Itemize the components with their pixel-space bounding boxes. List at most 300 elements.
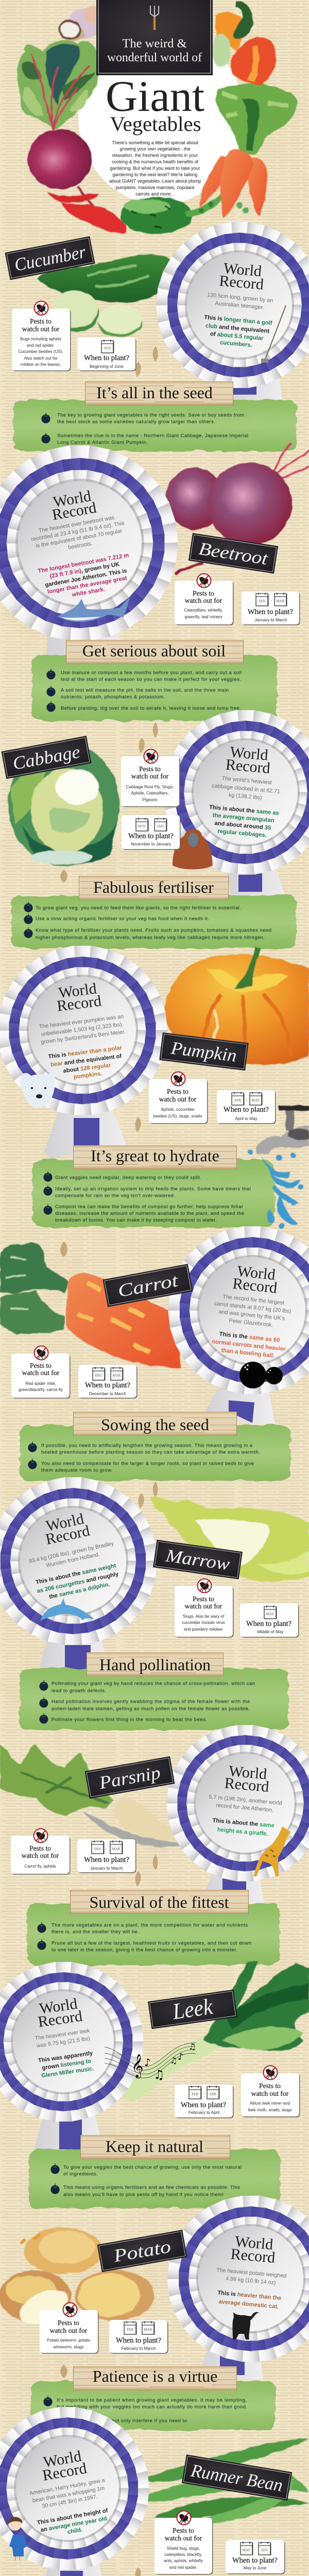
rosette text: runner bean record: This is about the height of (37, 2507, 109, 2526)
illustration: music notes: ♪ (144, 2056, 151, 2069)
ribbon tail: carrot rosette (205, 1386, 275, 1425)
card: pests to watch out for: Cabbage Root Fly, Slugs, (126, 785, 174, 789)
icon: calendars May to Jun (241, 2542, 271, 2555)
bullet list (41, 412, 248, 445)
icon: calendars Jan to Mar: JAN (94, 1847, 101, 1851)
rosette text: beetroot record: is the equivalent of about 70 regular (36, 528, 123, 549)
illustration: marrow (150, 1497, 309, 1581)
rosette: world record parsnip (146, 1709, 309, 1897)
card: pests to watch out for: Caterpillars, whitefly, (184, 608, 222, 613)
section: potato (0, 2178, 309, 2379)
ribbon tail: cabbage rosette (227, 868, 288, 904)
icon: calendars Apr to May: - (246, 1097, 248, 1101)
icon: calendar May: MAY (266, 1612, 274, 1616)
rosette text: pumpkin record (34, 977, 131, 1083)
rosette text: potato record: The heaviest potato weighed (216, 2267, 287, 2279)
card: pests to watch out for: and red spider. (169, 2565, 197, 2570)
bullet list (43, 1171, 251, 1223)
rosette text: carrot record: This is the same as 60 (219, 1331, 280, 1344)
card: pests to watch out for (11, 1829, 70, 1874)
wood sign heading (79, 876, 229, 900)
card: when to plant (175, 2084, 234, 2119)
section: It's great to hydrate (32, 1106, 309, 1229)
icon: calendars Jan to Mar: JAN (259, 599, 265, 603)
ribbon tail: marrow rosette (38, 1633, 109, 1674)
icon: no pests (197, 574, 211, 587)
bullet list: If possible, you need to artificially lengthen the growing season. This means growing in a (41, 1443, 253, 1448)
sign: Potato (97, 2230, 187, 2272)
illustration: peas (185, 191, 249, 216)
icon: calendars Nov to Jan: NOV (138, 824, 146, 828)
card: pests to watch out for: watch out for (185, 597, 222, 604)
card: when to plant (109, 2320, 168, 2353)
icon: golf club (261, 306, 286, 363)
card: pests to watch out for: watch out for (22, 1369, 60, 1377)
card: pests to watch out for: Slugs. Also be wary of (183, 1614, 225, 1619)
section: Keep it natural (29, 2135, 280, 2208)
illustration: broccoli (212, 34, 231, 67)
rosette text: pumpkin record: The heaviest ever pumpkin was an (39, 1013, 124, 1030)
card: pests to watch out for: leek moth, snails, slugs (248, 2108, 291, 2112)
card: when to plant: When to plant? (85, 1381, 130, 1389)
sign: Cucumber: Cucumber (13, 242, 88, 275)
sign: Cabbage: Cabbage (11, 741, 82, 774)
icon: calendars Jan to Mar: MAR (112, 1847, 121, 1851)
wood sign heading: Hand pollination (99, 1655, 211, 1674)
section: Get serious about soil (32, 640, 277, 721)
ribbon tail: parsnip rosette (200, 1865, 264, 1904)
bullet list: You also need to compensate for the larger & longer roots, so plant in raised beds to give (41, 1460, 254, 1466)
wood sign heading (73, 2366, 237, 2391)
rosette text: cabbage record: cabbage clocked in at 62.71 (212, 783, 280, 795)
rosette text: beetroot record (24, 483, 135, 603)
intro text (109, 140, 201, 197)
rosette text: marrow record: as 206 courgettes and roughly (37, 1571, 119, 1595)
icon: calendars Jan to Mar (92, 1840, 123, 1854)
illustration: cat (233, 2312, 259, 2340)
card: pests to watch out for (40, 2303, 99, 2353)
header: title and vegetable wreath (17, 0, 298, 234)
card: pests to watch out for: cucumber mosaic virus (182, 1620, 225, 1625)
intro text: gardening. But what if you want to take your (110, 166, 200, 171)
rosette text: marrow record: Record (44, 1522, 91, 1548)
rosette text: leek record: Record (37, 2008, 83, 2030)
card: pests to watch out for: watch out for (185, 1602, 222, 1610)
icon: calendars Apr to May (232, 1092, 263, 1106)
illustration: polar bear (21, 1073, 55, 1108)
card: when to plant: When to plant? (116, 2336, 161, 2345)
card: when to plant: January to March (254, 618, 287, 622)
rosette text: runner bean record: bean that was a whopping 1m (32, 2485, 105, 2504)
icon: calendar June: JUN (104, 346, 111, 350)
icon: calendars May to Jun: - (255, 2547, 256, 2551)
green panel (13, 400, 297, 451)
bullet list: Use manure or compost a few months before you plant, and carry out a soil (61, 670, 242, 675)
wood sign heading: It’s great to hydrate (91, 1146, 219, 1165)
illustration: girl (8, 2517, 28, 2561)
illustration: dolphin (40, 1598, 95, 1621)
ribbon tail: cucumber rosette (227, 374, 282, 401)
rosette text: beetroot record: World (52, 487, 92, 511)
card: when to plant (226, 2540, 285, 2574)
bullet list: the best stock as some varieties naturally grow larger than others. (57, 418, 215, 425)
rosette text: beetroot record: The heaviest ever beetroot was (38, 515, 115, 534)
rosette text: runner bean record: World (42, 2448, 82, 2471)
rosette text: carrot record: carrot stands at 9.07 kg (20 lbs) (214, 1300, 291, 1315)
icon: no pests (171, 1072, 185, 1086)
bullet list: It’s important to be patient when growing giant vegetables. It may be tempting, (57, 2397, 247, 2403)
illustration: music notes (105, 2042, 196, 2082)
icon: no pests (177, 2511, 191, 2524)
rosette text: marrow record: World (44, 1510, 85, 1535)
rosette: world record pumpkin (0, 928, 191, 1133)
icon: no pests (34, 1829, 47, 1842)
wood sign heading: Survival of the fittest (89, 1893, 229, 1911)
section: carrot (0, 1209, 309, 1425)
icon: calendars May to Jun: MAY (243, 2548, 250, 2552)
card: when to plant: When to plant? (224, 1106, 269, 1114)
illustration: music notes: 𝄞 (131, 2054, 144, 2079)
green panel (11, 895, 296, 948)
intro text: growing your own vegetables - the (119, 146, 191, 151)
rosette text: marrow record: 93.4 kg (206 lbs), grown by Bradley (28, 1540, 115, 1565)
bullet list: compensate for rain so the veg isn’t over-watered. (55, 1192, 175, 1198)
intro text: There’s something a little bit special about (112, 140, 198, 145)
ribbon tail: beetroot rosette (46, 629, 135, 666)
icon: calendars Dec to Mar: MAR (113, 1374, 121, 1378)
rosette: world record leek (0, 1945, 165, 2138)
rosette: world record potato (145, 2178, 309, 2379)
card: when to plant: Middle of May (258, 1630, 284, 1634)
rosette text: cabbage record: This is about the same as (209, 804, 279, 817)
rosette text: cucumber record: This is longer than a golf (204, 314, 272, 327)
wood sign heading: It’s all in the seed (96, 383, 213, 402)
icon: calendars Jan to Mar: - (271, 598, 272, 602)
rosette: world record beetroot (0, 425, 204, 661)
card: pests to watch out for: Bugs including aphids (20, 337, 61, 341)
card: pests to watch out for (154, 2511, 213, 2575)
rosette text: leek record: This was apparently (38, 2050, 94, 2064)
icon: no pests (144, 749, 158, 764)
card: pests to watch out for (11, 1346, 70, 1398)
icon: calendars Apr to May: APR (234, 1098, 242, 1103)
card: pests to watch out for: Pests to (167, 1088, 188, 1095)
card: pests to watch out for: Red spider mite, (25, 1381, 56, 1386)
illustration: beetroots (165, 443, 309, 574)
illustration: orangutan (173, 829, 213, 870)
section: marrow (0, 1460, 309, 1674)
rosette text: cucumber record: Record (218, 272, 264, 293)
bullet list: The key to growing giant vegetables is the right seeds. Save or buy seeds from (57, 412, 244, 417)
card: pests to watch out for: Carrot fly, aphids (24, 1864, 56, 1869)
illustration: beet leaves (17, 40, 98, 130)
sign: Carrot: Carrot (116, 1270, 180, 1301)
title line: The weird &: The weird & (122, 37, 187, 50)
card: pests to watch out for: Allium leek miner and (250, 2101, 290, 2106)
sign: Cucumber (5, 236, 95, 280)
card: when to plant (78, 1365, 137, 1398)
bullet list: To grow giant veg, you need to feed them like giants, so the right fertiliser is essential. (36, 905, 241, 910)
wood sign heading (80, 2135, 230, 2159)
illustration: carrots (200, 149, 267, 218)
wood sign heading: Sowing the seed (101, 1415, 209, 1434)
bullet list: lead to growth defects. (52, 1688, 106, 1693)
card: pests to watch out for: wireworm, slugs (53, 2345, 83, 2349)
bullet list (39, 1680, 255, 1724)
rosette text: carrot record: Peter Glazebrook. (229, 1317, 273, 1328)
rosette text: leek record (30, 1994, 96, 2079)
illustration: music notes: ♪ (178, 2052, 183, 2062)
card: when to plant: When to plant? (248, 608, 293, 616)
ribbon tail: runner bean rosette (44, 2555, 104, 2576)
rosette text: potato record: average domestic cat. (218, 2299, 279, 2310)
title line: wonderful world of: wonderful world of (107, 50, 202, 64)
card: pests to watch out for: Pests to (29, 1844, 51, 1852)
rosette text: carrot record (209, 1261, 296, 1360)
illustration: squash (215, 2, 277, 86)
bullet list: Use a slow acting organic fertiliser so your veg has food when it needs it. (36, 916, 209, 921)
bullet list: pollen-laden male stamen, getting as much pollen on the female flower as possible. (52, 1705, 250, 1711)
rosette text: runner bean record: an average nine year old (40, 2516, 108, 2533)
sign: Leek (148, 1990, 237, 2029)
card: pests to watch out for: watch out for (50, 2327, 88, 2334)
illustration: giraffe (253, 1826, 291, 1876)
intro text: carrots and more... (135, 192, 175, 197)
section: cucumber (5, 205, 309, 405)
card: pests to watch out for: Pests to (139, 765, 161, 773)
rosette text: cucumber record: 130.5cm long, grown by an (207, 292, 273, 304)
rosette text: cucumber record (202, 259, 278, 350)
rosette text: carrot record: and was grown by the UK’s (218, 1309, 285, 1322)
rosette text: potato record: 4.98 kg (10 lb 14 oz) (226, 2276, 276, 2286)
illustration: red chillies (47, 192, 127, 234)
white circle behind title (78, 27, 243, 205)
card: when to plant (242, 591, 300, 625)
rosette: world record runner bean (0, 2390, 171, 2576)
sign: Runner Bean (182, 2454, 292, 2501)
rosette text: pumpkin record: grown by Switzerland’s Beni Meier. (41, 1029, 126, 1045)
card: pests to watch out for: Pests to (193, 1595, 214, 1603)
bullet list (46, 669, 242, 712)
rosette text: cabbage record: and about around 35 (214, 820, 271, 832)
rosette text: marrow record: the same as a dolphin. (48, 1581, 110, 1600)
card: when to plant: January to March (90, 1866, 123, 1871)
card: pests to watch out for: Pests to (58, 2319, 79, 2327)
wood sign heading: Keep it natural (106, 2137, 203, 2156)
bullet list: Giant veggies need regular, deep watering or they could split. (55, 1175, 201, 1180)
sign: Carrot (102, 1264, 193, 1307)
rosette text: pumpkin record: This is heavier than a polar (48, 1045, 123, 1060)
icon: calendars Apr to May: MAY (252, 1098, 260, 1103)
intro text: cooking & the numerous health benefits of (112, 159, 199, 164)
ribbon tail: pumpkin rosette (44, 1097, 126, 1159)
section: It's all in the seed (13, 381, 297, 451)
icon: calendars Jan to Mar (256, 592, 287, 606)
icon: calendars Feb to Mar: MAR (144, 2328, 152, 2332)
rosette text: cabbage record: the average orangutan (212, 812, 274, 824)
bullet list: Pollinate your flowers first thing in the morning to beat the bees. (52, 1717, 207, 1722)
rosette: world record marrow (0, 1460, 180, 1663)
card: pests to watch out for: watch out for (159, 1095, 197, 1103)
card: pests to watch out for: greenfly, leaf miners (184, 615, 222, 619)
bullet list: To give your veggies the best chance of growing, use only the most natural (63, 2164, 242, 2170)
illustration: parsnip root (82, 1797, 197, 1847)
rosette text: beetroot record: gardener Joe Atherton. This is (45, 568, 127, 588)
card: when to plant (217, 1090, 276, 1124)
rosette text: cabbage record: regular cabbages. (217, 828, 267, 839)
wood sign heading (73, 1412, 237, 1436)
section: Patience is a virtue (31, 2366, 276, 2430)
green panel (31, 2381, 276, 2430)
rosette text: runner bean record (23, 2444, 113, 2541)
rosette text: cucumber record: club and the equivalent (205, 323, 270, 334)
wood sign heading (87, 1652, 224, 1676)
icon: calendars Feb to Apr (189, 2086, 219, 2099)
rosette text: parsnip record: height as a giraffe. (217, 1827, 268, 1837)
bullet list: them adequate room to grow. (41, 1467, 113, 1472)
card: pests to watch out for: Aphids, Caterpillars, (131, 791, 169, 795)
card: pests to watch out for: Pigeons (142, 798, 158, 802)
bullet list: to one later in the season, giving it the best chance of growing into a monster. (52, 1946, 237, 1953)
rosette text: runner bean record: 30 cm (4ft 3in) in 1997. (42, 2494, 98, 2510)
rosette text: pumpkin record: World (58, 980, 97, 1002)
green panel (20, 1425, 290, 1481)
section: leek (0, 1945, 309, 2151)
icon: no pests (34, 301, 48, 315)
card: when to plant: When to plant? (232, 2556, 278, 2565)
bullet list (43, 2396, 247, 2424)
illustration: carrot leaves (0, 1242, 70, 1334)
icon: calendars May to Jun: JUN (261, 2548, 268, 2552)
bullet list: Pollinating your giant veg by hand reduces the chance of cross-pollination, which can (52, 1681, 255, 1686)
card: pests to watch out for (12, 301, 71, 371)
bullet list: Long Carrot & Atlantic Giant Pumpkin. (57, 439, 148, 445)
sign: Pumpkin (159, 1032, 249, 1071)
rosette: world record carrot (145, 1209, 309, 1412)
rosette: world record cucumber (133, 205, 309, 405)
rosette text: carrot record: than a bowling ball. (221, 1347, 274, 1359)
rosette text: parsnip record (206, 1761, 285, 1838)
sign: Parsnip: Parsnip (97, 1762, 162, 1793)
green panel (20, 1668, 288, 1730)
green panel (29, 2149, 280, 2208)
card: pests to watch out for: green/blackfly, carrot fly (19, 1387, 63, 1392)
icon: bowling balls (239, 1362, 283, 1388)
icon: calendars Feb to Mar: - (139, 2327, 140, 2331)
illustration: potatoes (0, 2228, 154, 2331)
rosette text: potato record: This is heavier than the (217, 2290, 282, 2301)
illustration: shark (57, 598, 130, 622)
wood sign heading: Fabulous fertiliser (93, 878, 214, 896)
wood sign heading (85, 381, 233, 405)
chalkboard: title plate (96, 0, 213, 75)
bullet list: higher phosphorous & potassium levels, whereas leafy veg like cabbages require more nitrogen. (36, 935, 265, 940)
bullet list (37, 1922, 251, 1953)
bullet list: Ideally, set up an irrigation system to drip feeds the plants. Some have timers that (55, 1186, 251, 1191)
rosette text: cucumber record: cucumbers. (220, 340, 252, 348)
rosette text: cucumber record: World (223, 260, 262, 280)
wood sign heading: Get serious about soil (82, 641, 226, 660)
green panel (32, 655, 277, 721)
card: when to plant: When to plant? (181, 2101, 226, 2109)
title: Vegetables: Vegetables (110, 112, 201, 135)
bullet list: Know what type of fertiliser your plants need. Fruits such as pumpkins, tomatoes & squashes need (36, 927, 271, 933)
card: pests to watch out for: Cucumber beetles (US). (18, 349, 63, 354)
rosette text: parsnip record: This is about the same (212, 1818, 274, 1829)
card: pests to watch out for: Pests to (193, 589, 214, 597)
icon: calendars Jan to Mar: - (106, 1846, 108, 1850)
rosette text: parsnip record: record for Joe Atherton. (216, 1802, 273, 1814)
icon: no pests (264, 2066, 277, 2079)
intro text: gardening to the next level? We’re talking (113, 172, 197, 177)
green panel (32, 1159, 274, 1227)
sign: Marrow (153, 1540, 243, 1579)
card: when to plant: When to plant? (246, 1620, 291, 1628)
icon: calendars Feb to Apr: - (203, 2091, 205, 2095)
rosette text: beetroot record: The longest beetroot was 7.212 m (38, 552, 129, 574)
icon: calendars Nov to Jan: - (150, 823, 152, 827)
illustration: water splash (248, 1149, 303, 1229)
illustration: leek (119, 1961, 309, 2100)
rosette text: potato record (213, 2231, 290, 2311)
bullet list: Sometimes the clue is in the name - Northern Giant Cabbage, Japanese Imperial (57, 433, 248, 438)
rosette text: pumpkin record: Record (56, 992, 102, 1015)
card: pests to watch out for: Pests to (259, 2082, 281, 2090)
card: when to plant (240, 1603, 299, 1637)
rosette text: parsnip record: Record (224, 1774, 270, 1795)
card: pests to watch out for: mildew on the leaves. (21, 362, 61, 367)
card: when to plant: February to March (122, 2346, 156, 2351)
card: pests to watch out for: watch out for (251, 2090, 289, 2097)
rosette text: pumpkin record: bear and the equivalent of (50, 1053, 122, 1068)
card: pests to watch out for: Pests to (30, 1362, 52, 1369)
rosette text: cabbage record: Record (225, 756, 271, 777)
card: when to plant: May to June (244, 2566, 267, 2570)
rosette text: carrot record: Record (232, 1275, 278, 1297)
rosette: world record cabbage (141, 693, 309, 892)
card: when to plant: When to plant? (128, 832, 174, 840)
rosette text: marrow record: This is about the same weight (35, 1563, 117, 1586)
rosette text: cabbage record: kg (138.2 lbs) (229, 792, 262, 801)
section: Fabulous fertiliser (11, 876, 296, 948)
ribbon tail: potato rosette (197, 2339, 263, 2379)
illustration: cucumber (38, 255, 174, 337)
section: beetroot (0, 425, 309, 666)
icon: no pests (63, 2303, 77, 2316)
section: pumpkin (0, 928, 309, 1159)
sign: Marrow: Marrow (164, 1545, 231, 1574)
card: when to plant: November to January (131, 842, 171, 846)
rosette text: marrow record (21, 1505, 123, 1603)
rosette text: beetroot record: white shark. (71, 586, 106, 598)
rosette text: pumpkin record: pumpkins. (73, 1071, 102, 1080)
bullet list (28, 1442, 260, 1472)
green panel (27, 1903, 280, 1965)
bullet list: test at the start of each season so you can make it perfect for your veggies. (61, 676, 241, 682)
illustration: music notes: ♫ (170, 2056, 177, 2065)
icon: garden fork (150, 6, 159, 30)
bullet list: of ingredients. (63, 2171, 98, 2176)
card: pests to watch out for: watch out for (22, 1852, 59, 1859)
bullet list: Check them every day but only interfere if you need to. (57, 2417, 188, 2424)
wood sign heading: Patience is a virtue (93, 2367, 217, 2385)
bullet list: breakdown of toxins. You can make it by steeping compost in water. (55, 1217, 217, 1223)
bullet list (24, 902, 271, 940)
card: pests to watch out for: ants, aphids, whitefly (164, 2558, 203, 2563)
bullet list: also means you’ll have to pick pests off by hand if you notice them! (63, 2192, 224, 2197)
rosette text: beetroot record: longer than the average great (47, 575, 128, 595)
card: pests to watch out for: watch out for (22, 325, 60, 333)
